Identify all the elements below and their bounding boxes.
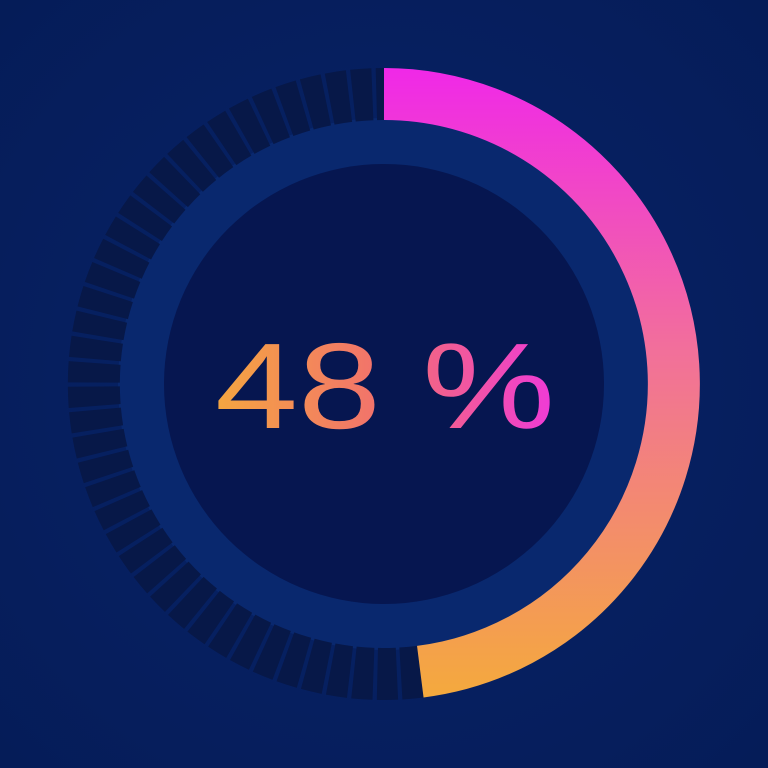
inner disk xyxy=(164,164,604,604)
mid ring band xyxy=(118,118,650,650)
progress arc 48% xyxy=(384,94,674,672)
percentage label: 48 % xyxy=(215,318,555,454)
segmented remaining track xyxy=(94,94,420,674)
